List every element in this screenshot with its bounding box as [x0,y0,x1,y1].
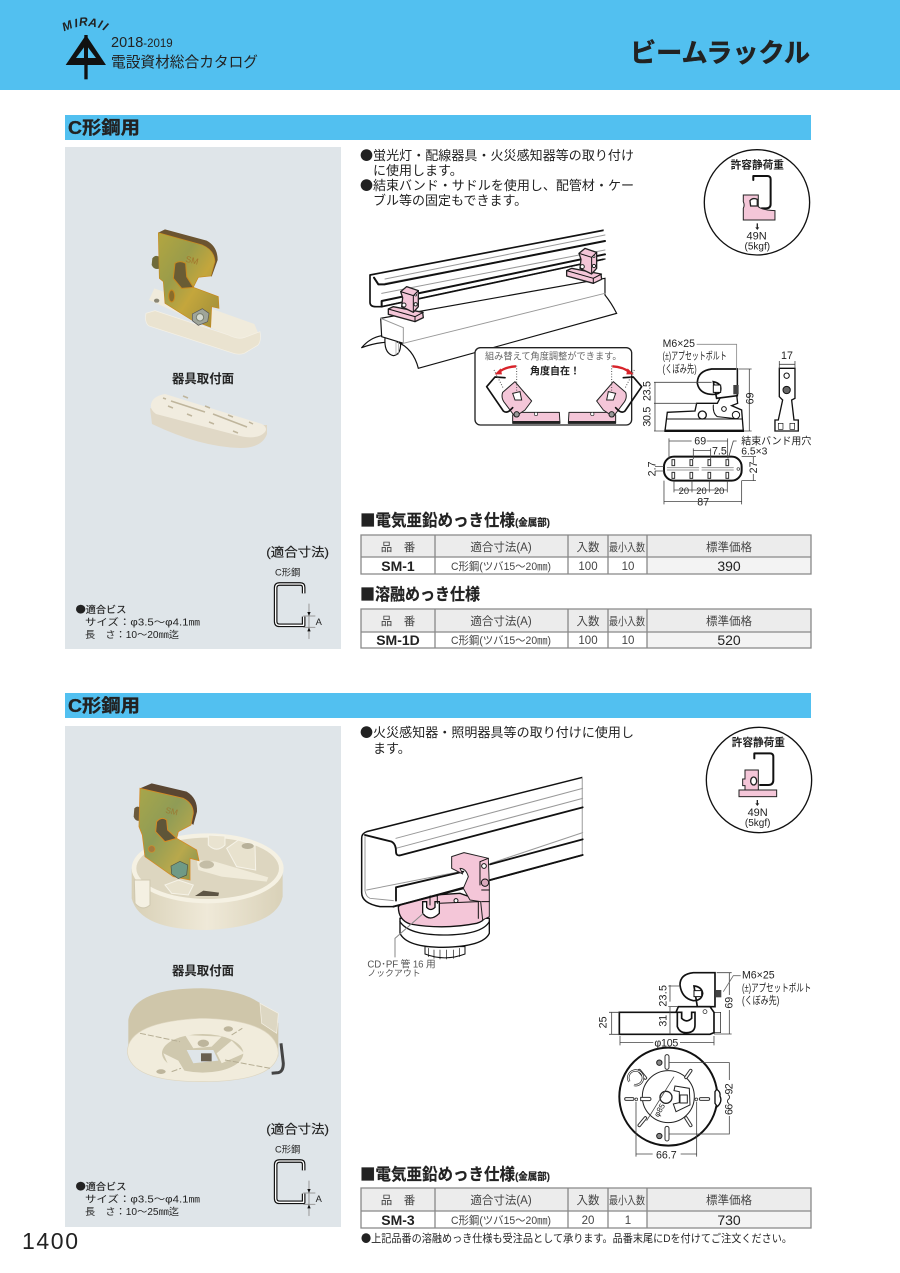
dimension drawing 1 [642,338,811,508]
section heading 2: C形鋼用 [68,696,140,716]
installation diagram 2 [362,776,587,978]
table: SM-1D: C形鋼(ツバ15～20㎜) [451,633,551,647]
knockout leader [395,913,423,957]
front view: 17 [781,350,793,362]
page title: ビームラックル [630,38,810,68]
beam clip right [567,248,602,283]
section heading 2 [65,693,811,718]
C channel rail [370,230,605,307]
dimension drawing 2 [598,970,811,1161]
dimension drawing 2: 25 [598,1016,610,1028]
photo: bracket on base: SM [185,254,200,267]
knockout label: ノックアウト [367,968,421,978]
installation diagram 1 [362,229,617,368]
fit size note: A [316,617,323,627]
dimension drawing 1: 69 [694,435,706,447]
table: SM-1D: 520 [717,632,741,648]
fit size note: (適合寸法) [266,545,329,559]
logo: MIRAI antenna mark: A [87,15,98,30]
table: SM-1D [361,609,811,648]
dimension drawing 2: (くぼみ先) [742,995,779,1007]
table: SM-1D: 100 [578,635,598,647]
fitting screw spec: ●適合ビス [76,1179,126,1193]
table: SM-3: 20 [582,1215,594,1227]
dimension drawing 1: M6×25 [663,338,695,350]
dimension drawing 1: 6.5×3 [741,446,768,457]
bottom view: φ85 [652,1101,667,1119]
table: SM-3: 品 番 [381,1194,416,1207]
logo: MIRAI antenna mark: M [60,17,75,34]
logo: MIRAI antenna mark: R [79,14,89,29]
fitting screw spec: サイズ：φ3.5～φ4.1㎜ [85,1193,200,1205]
allowable load circle 1: 49N [747,231,767,243]
fit size note: C形鋼 [275,1144,300,1155]
heading: electro-galvanized spec: ■電気亜鉛めっき仕様(金属部) [360,1161,550,1185]
table: SM-3: C形鋼(ツバ15～20㎜) [451,1213,551,1227]
table: SM-1: 適合寸法(A) [470,540,532,554]
section heading 1: C形鋼用 [68,118,140,138]
knockout label [367,958,436,978]
logo: MIRAI antenna mark: I [73,16,80,30]
beam clip left [388,287,423,322]
header band [0,0,900,90]
table: SM-1D: 品 番 [381,615,416,628]
table: SM-1: 100 [578,561,598,573]
C channel rail [362,777,583,907]
dimension drawing 2: 23.5 [658,985,670,1007]
photo: round box face [127,988,283,1082]
table: SM-1: 最小入数 [609,541,645,554]
photo label: 器具取付面 [172,371,234,386]
heading: electro-galvanized spec: ■電気亜鉛めっき仕様(金属部) [360,507,550,531]
dimension lines [654,369,756,504]
allowable load circle 1 [704,150,810,255]
table: SM-3: 730 [717,1212,741,1228]
left tilted clip [487,366,560,424]
fitting screw spec: サイズ：φ3.5～φ4.1㎜ [85,616,200,628]
feature text 1: ブル等の固定もできます。 [373,193,527,208]
dimension drawing 1: 20 [714,486,724,496]
feature text 1: に使用します。 [373,163,463,178]
plan view [664,457,742,481]
panel: product photo 1 [65,147,341,649]
table: SM-1D: 10 [622,635,634,647]
fit size note [266,545,329,639]
pink bracket [423,853,489,920]
allowable load circle 2: (5kgf) [745,818,770,829]
fitting screw spec [76,1179,200,1218]
feature text 1 [360,145,634,208]
table: SM-1: 10 [622,561,634,573]
logo: MIRAI antenna mark: I [96,17,105,32]
photo label: 器具取付面 [172,963,234,978]
dimension drawing 2: 69 [724,997,736,1009]
catalog year: 2018-2019 [111,35,173,51]
fitting screw spec: 長 さ：10～20㎜迄 [85,629,179,641]
bottom view [619,1048,721,1146]
table: SM-1D: SM-1D [376,632,420,648]
allowable load circle 2 [706,727,812,833]
section heading 1 [65,115,811,140]
allowable load circle 2: 49N [748,807,768,819]
front view [775,350,798,431]
dimension drawing 1: 結束バンド用穴 [741,434,811,447]
photo: bracket on base [146,229,260,354]
dimension drawing 1: 87 [697,496,709,508]
table: SM-1: 390 [717,558,741,574]
photo: mounting face [150,394,267,448]
feature text 2: ●火災感知器・照明器具等の取り付けに使用し [360,722,634,741]
photo: bracket in round box [132,783,284,930]
dimension drawing 1: 27 [748,461,760,473]
callout: angle adjustment [475,348,642,425]
dimension drawing 1: 23.5 [642,381,654,401]
logo: MIRAI antenna mark [60,14,111,79]
table: SM-1D: 最小入数 [609,615,645,628]
table: SM-1D: 標準価格 [706,614,752,628]
allowable load circle 2: 許容静荷重 [732,736,785,749]
dimension drawing 1: 20 [679,486,689,496]
feature text 2: ます。 [373,741,411,756]
dimension drawing 2: (±)アプセットボルト [742,982,811,994]
feature text 1: ●結束バンド・サドルを使用し、配管材・ケー [360,175,634,194]
table: SM-3: 入数 [576,1194,600,1207]
table: SM-1: 品 番 [381,541,416,554]
dimension drawing 1: 20 [696,486,707,496]
dimension drawing 2: φ105 [654,1038,678,1050]
callout: angle adjustment: 組み替えて角度調整ができます。 [485,351,622,363]
heading: hot-dip spec: ■溶融めっき仕様 [360,581,481,605]
dimension drawing 1: 30.5 [642,407,654,427]
dimension drawing 2: 66～92 [724,1083,736,1115]
fit size note: C形鋼 [275,567,300,578]
feature text 2 [360,722,634,756]
dimension drawing 1: 69 [744,392,756,404]
dimension drawing 1: 7.5 [712,445,727,457]
fitting screw spec: 長 さ：10～25㎜迄 [85,1206,179,1218]
dimension drawing 1: 2.7 [646,461,658,476]
fit size note [266,1122,329,1216]
dimension drawing 1: (±)アプセットボルト [663,351,727,363]
side view [664,369,744,432]
callout: angle adjustment: 角度自在！ [530,365,580,378]
table: SM-3: 最小入数 [609,1194,645,1207]
right tilted clip [568,366,642,424]
side view [619,973,721,1034]
light fixture [381,278,617,368]
table: SM-1D: 適合寸法(A) [470,614,532,628]
table: SM-1: 入数 [576,541,600,554]
feature text 1: ●蛍光灯・配線器具・火災感知器等の取り付け [360,145,634,164]
table: SM-1: C形鋼(ツバ15～20㎜) [451,559,551,573]
panel: product photo 2 [65,726,341,1227]
fit size note: A [316,1194,323,1204]
knockout label: CD･PF 管 16 用 [367,958,436,970]
catalog name: 電設資材総合カタログ [111,54,258,71]
table: SM-1: 標準価格 [706,540,752,554]
pink round fixture [398,893,489,959]
dimension lines [609,973,732,1157]
fitting screw spec [76,602,200,641]
table: SM-1D: 入数 [576,615,600,628]
fit size note: (適合寸法) [266,1122,329,1136]
fitting screw spec: ●適合ビス [76,602,126,616]
table: SM-3: 適合寸法(A) [470,1193,532,1207]
photo: bracket in round box: SM [165,805,179,817]
dimension drawing 1: (くぼみ先) [663,363,697,375]
page number: 1400 [22,1228,78,1254]
table: SM-3: 標準価格 [706,1193,752,1207]
dimension drawing 2: M6×25 [742,970,775,982]
allowable load circle 1: (5kgf) [745,241,770,252]
table: SM-3 [361,1188,811,1228]
table: SM-3: 1 [625,1215,631,1227]
table: SM-1: SM-1 [381,558,415,574]
allowable load circle 1: 許容静荷重 [731,158,784,171]
logo: MIRAI antenna mark: I [100,20,111,34]
dimension drawing 2: 66.7 [656,1149,677,1161]
dimension drawing 2: 31 [658,1015,670,1027]
table: SM-1 [361,535,811,574]
table: SM-3: SM-3 [381,1212,415,1228]
footnote: ●上記品番の溶融めっき仕様も受注品として承ります。品番末尾にDを付けてご注文ください。 [361,1230,792,1246]
